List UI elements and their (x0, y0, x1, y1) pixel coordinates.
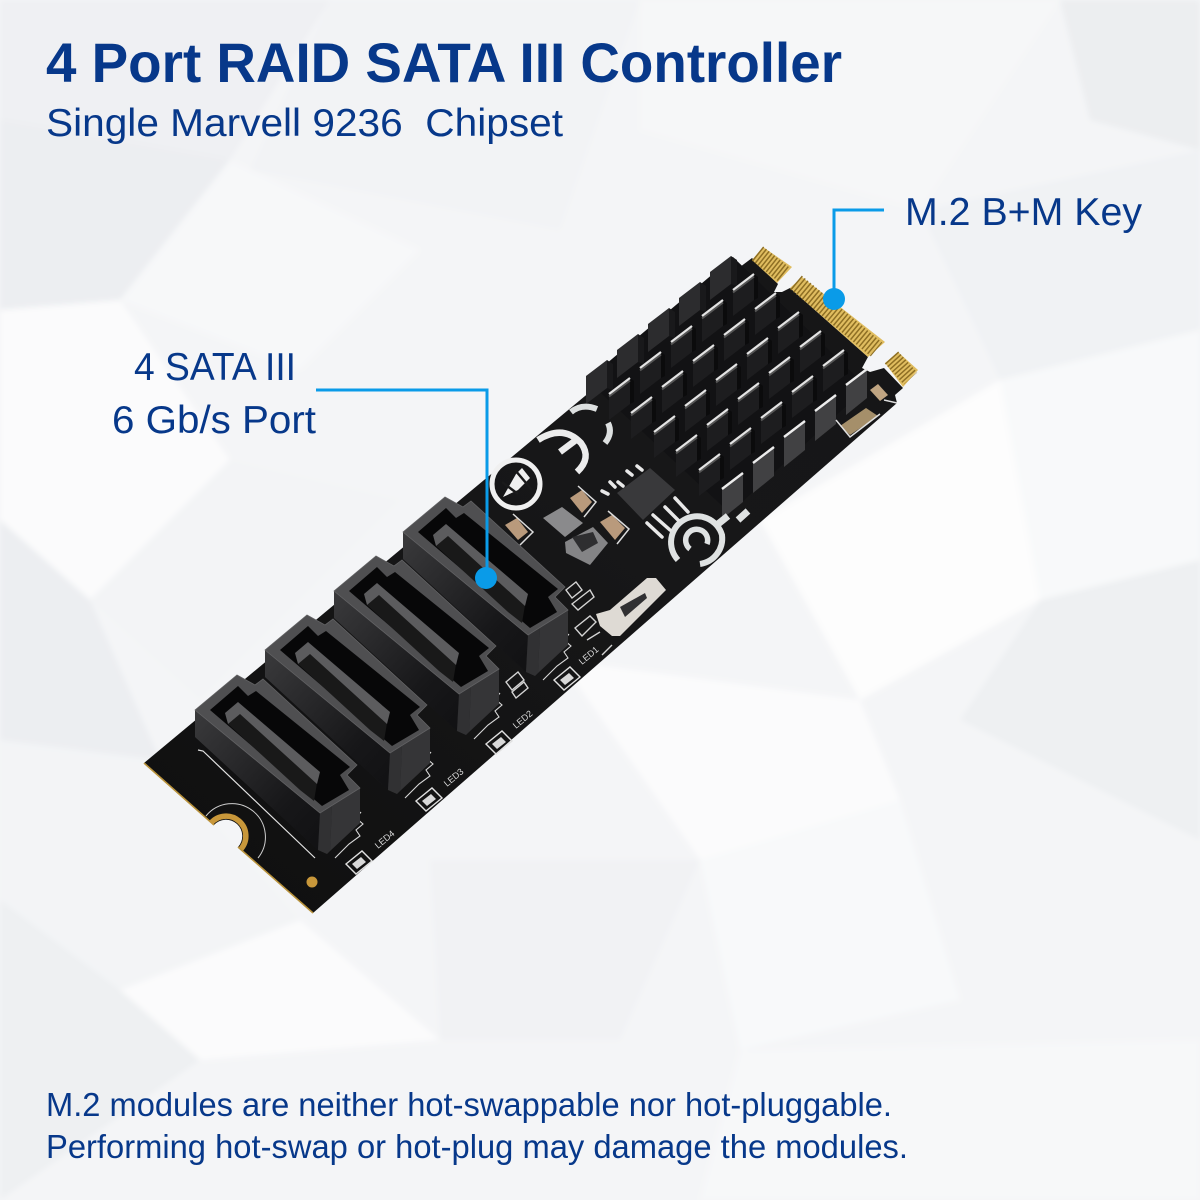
callout leader line (316, 390, 487, 578)
inductor: plain (543, 507, 583, 537)
connector silkscreen outline (198, 750, 315, 858)
controller chip (617, 468, 675, 520)
title: 4 Port RAID SATA III Controller (46, 31, 842, 94)
LED 3 (486, 708, 535, 754)
silkscreen logo: concentric target (671, 511, 748, 564)
LED 4: LED1 (577, 644, 601, 667)
gold finger: right (885, 352, 918, 387)
gold via dot (306, 876, 318, 888)
note line 2: Performing hot-swap or hot-plug may damage the modules. (46, 1128, 908, 1165)
slide switch (596, 578, 666, 636)
warning note (46, 1086, 908, 1165)
LED 2 (416, 766, 466, 811)
LED 1 (346, 828, 397, 874)
crystal component (836, 384, 897, 437)
callout: M.2 B+M Key (823, 191, 1142, 310)
SATA connector 4 (403, 497, 571, 680)
callout label line 2: 6 Gb/s Port (112, 399, 316, 442)
callout label: M.2 B+M Key (905, 191, 1142, 234)
LED 4 (554, 644, 601, 690)
silkscreen arcs (571, 407, 610, 443)
LED 2: LED3 (442, 766, 466, 789)
SATA connector 3 (334, 556, 502, 739)
heatsink (586, 256, 867, 519)
pad clusters (506, 582, 612, 698)
inductor: marked (565, 527, 608, 565)
LED 3: LED2 (511, 708, 535, 731)
subtitle: Single Marvell 9236 Chipset (46, 102, 563, 145)
PCB board (144, 258, 903, 913)
silkscreen logo: round badge (492, 460, 540, 508)
capacitors (505, 486, 629, 545)
chip pin markers (602, 466, 688, 537)
callout dot (475, 567, 497, 589)
M.2 adapter card (144, 247, 918, 913)
silkscreen logo: E circle (538, 433, 586, 472)
callout: SATA ports (112, 346, 497, 589)
heatsink pins (586, 256, 867, 519)
callout label line 1: 4 SATA III (134, 346, 296, 389)
SATA connector 2 (265, 615, 433, 798)
gold finger: middle (790, 277, 885, 357)
heatsink base (587, 257, 867, 513)
mounting notch gold ring (211, 816, 246, 849)
LED 1: LED4 (373, 828, 397, 851)
board edge highlight (144, 763, 313, 913)
note line 1: M.2 modules are neither hot-swappable nor hot-pluggable. (46, 1086, 892, 1123)
callout leader line (834, 210, 884, 299)
silk arc around notch (206, 804, 265, 858)
callout dot (823, 288, 845, 310)
SATA connector 1 (195, 675, 363, 858)
gold finger: left (752, 247, 792, 283)
